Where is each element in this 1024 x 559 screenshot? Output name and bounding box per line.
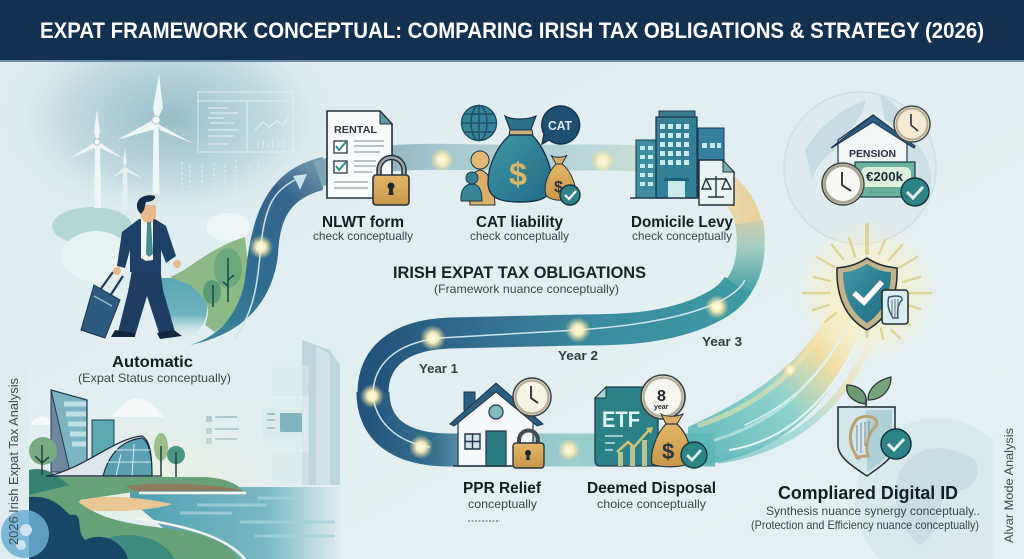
icon: cat money bags: $ xyxy=(554,179,563,196)
left caption strip xyxy=(0,355,49,559)
small clock xyxy=(894,106,930,142)
ribbon: rising start xyxy=(190,157,323,345)
check badge xyxy=(681,442,707,468)
icon: pension house xyxy=(784,92,936,244)
building: dome xyxy=(48,436,152,476)
text: deemed disposal xyxy=(587,480,716,511)
text: section heading xyxy=(393,263,646,296)
illustration: coast and trees xyxy=(162,237,252,340)
ribbon: top band xyxy=(318,157,749,225)
check badge xyxy=(901,178,929,206)
label: year 1: Year 1 xyxy=(419,361,458,376)
dark foliage xyxy=(29,497,128,559)
icon: mid wind turbine xyxy=(69,109,124,208)
rays xyxy=(803,225,931,339)
icon: small wind turbine xyxy=(112,148,143,210)
text: automatic xyxy=(78,354,231,385)
icon: large wind turbine xyxy=(117,74,194,194)
text: nlwt form: NLWT form xyxy=(322,214,404,231)
icon: padlock xyxy=(373,158,409,205)
bag xyxy=(661,414,683,424)
people xyxy=(469,170,495,205)
text: deemed disposal: choice conceptually xyxy=(597,497,706,511)
leaves xyxy=(847,385,866,404)
speech bubble: CAT xyxy=(548,118,572,133)
ribbon: bottom band xyxy=(373,392,715,450)
text: ppr relief: PPR Relief xyxy=(463,480,542,497)
label: year 2: Year 2 xyxy=(558,348,598,363)
timer: 8 xyxy=(657,388,666,405)
timer xyxy=(641,375,685,419)
icon: rental form with lock: RENTAL xyxy=(334,124,378,136)
icon: pension house: €200k xyxy=(866,169,904,184)
building: block xyxy=(92,420,114,460)
globe backdrop xyxy=(784,92,936,244)
ghost towers and ui panel xyxy=(198,340,340,485)
timer: year xyxy=(654,404,669,411)
text: deemed disposal: Deemed Disposal xyxy=(587,480,716,497)
text: ppr relief xyxy=(463,480,542,521)
globe xyxy=(462,105,496,141)
ribbon: middle band xyxy=(373,285,738,393)
clock xyxy=(513,378,551,416)
text: compliared digital id xyxy=(751,483,980,532)
icon: cat money bags xyxy=(461,105,580,205)
suit torso xyxy=(117,219,176,272)
icon: etf document with timer and bag xyxy=(595,375,707,468)
text: cat liability: check conceptually xyxy=(470,229,569,243)
hands xyxy=(113,267,121,275)
sky xyxy=(10,380,290,520)
text: domicile levy: check conceptually xyxy=(632,229,732,243)
harp xyxy=(850,416,877,458)
text: nlwt form xyxy=(313,214,413,243)
text: domicile levy xyxy=(631,214,733,243)
text: automatic: Automatic xyxy=(112,354,193,371)
illustration: waterfront city xyxy=(10,340,340,559)
arrow head xyxy=(293,174,307,190)
milestone glows xyxy=(249,148,797,461)
text: nlwt form: check conceptually xyxy=(313,229,413,243)
text: compliared digital id: Compliared Digital ID xyxy=(778,483,958,503)
icon: pension house: PENSION xyxy=(849,148,896,160)
text: cat liability: CAT liability xyxy=(476,214,563,231)
text: compliared digital id: Synthesis nuance synergy conceptualy.. xyxy=(766,504,980,518)
ribbon: right turn xyxy=(738,222,751,287)
building: tower xyxy=(51,390,87,472)
small bag xyxy=(551,155,567,164)
logo badge xyxy=(1,510,49,558)
large bag: $ xyxy=(509,156,527,192)
figure: expat with suitcase xyxy=(81,195,182,339)
icon: etf document with timer and bag: ETF xyxy=(602,407,640,432)
check badge xyxy=(560,185,580,205)
illustration: wind turbines and data panel xyxy=(0,6,348,281)
text: section heading: IRISH EXPAT TAX OBLIGATIONS xyxy=(393,263,646,282)
text: vertical caption right: Alvar Mode Analysis xyxy=(1004,428,1016,543)
icon: shield with harp and rays xyxy=(795,220,939,364)
ribbon: final sweep xyxy=(688,305,880,466)
large clock xyxy=(822,163,864,205)
head xyxy=(141,205,156,222)
text: cat liability xyxy=(470,214,569,243)
text: domicile levy: Domicile Levy xyxy=(631,214,733,231)
icon: etf document with timer and bag: $ xyxy=(662,439,674,464)
ribbon highlight line xyxy=(235,180,745,447)
icon: digital id shield with leaves xyxy=(838,377,911,476)
text: vertical caption left: 2026 Irish Expat Tax Analysis xyxy=(7,378,21,545)
text: ppr relief: conceptually xyxy=(468,497,537,511)
panel: bottom right globe xyxy=(855,418,1024,559)
text: automatic: (Expat Status conceptually) xyxy=(78,371,231,385)
check badge xyxy=(881,429,911,459)
icon: rental form with lock xyxy=(327,111,409,205)
text: section subheading: (Framework nuance conceptually) xyxy=(434,282,619,296)
icon: buildings and legal document xyxy=(630,111,734,205)
header band xyxy=(0,0,1024,62)
data panel xyxy=(182,92,293,193)
icon: ppr house with clock and lock xyxy=(450,378,551,468)
ground xyxy=(29,477,243,559)
flow ribbon xyxy=(190,148,880,466)
trees xyxy=(29,437,57,465)
legal document xyxy=(699,160,734,205)
harp card xyxy=(882,290,908,324)
label: year 3: Year 3 xyxy=(702,334,742,349)
icon: suitcase xyxy=(81,272,123,338)
sea xyxy=(130,487,340,559)
suit legs xyxy=(118,266,175,336)
text: compliared digital id: (Protection and Efficiency nuance conceptually) xyxy=(751,518,979,532)
padlock xyxy=(513,430,544,468)
baseline xyxy=(46,475,162,477)
